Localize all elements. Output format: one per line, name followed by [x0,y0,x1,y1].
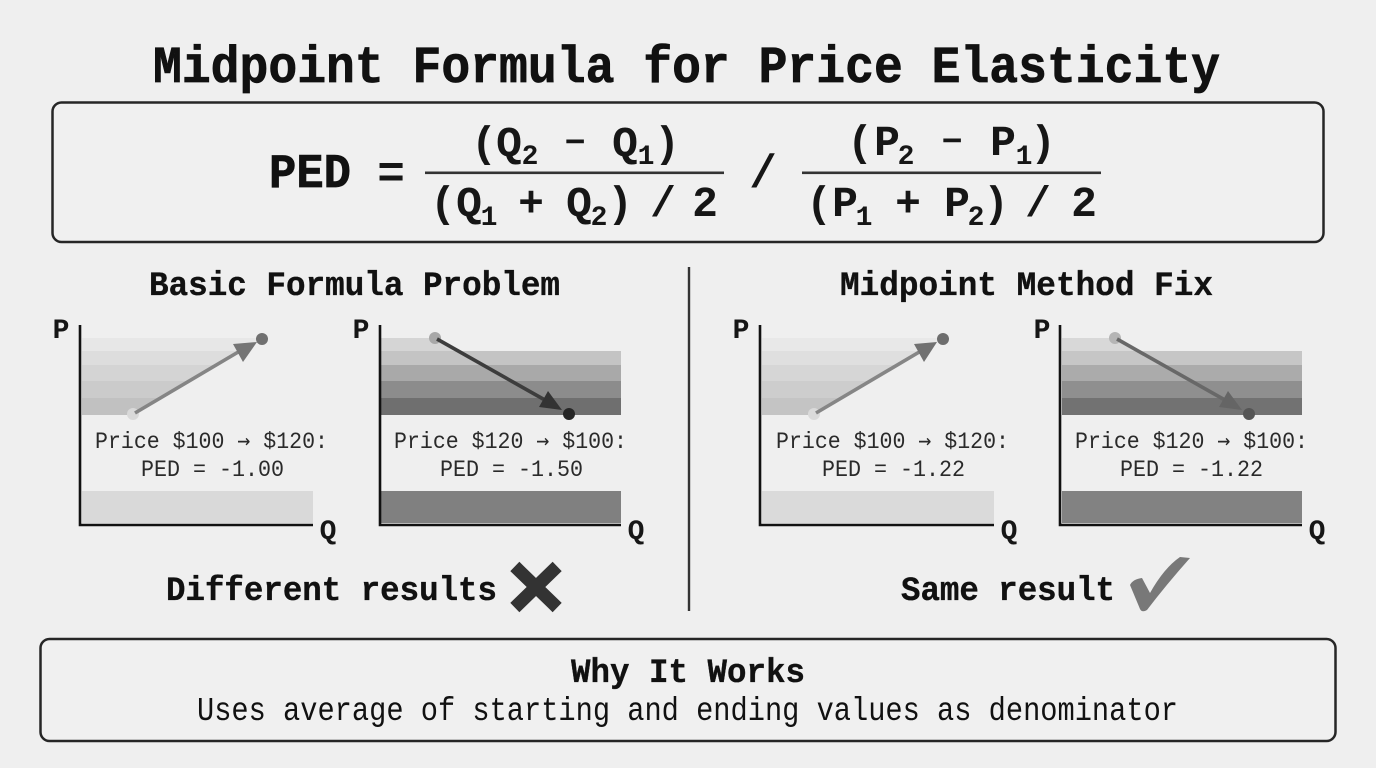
price fraction: P [990,119,1016,168]
result: same result [901,557,1190,611]
quantity fraction: 2 [591,203,607,234]
price fraction [802,119,1101,234]
price fraction: 1 [1016,142,1032,173]
caption: Price $100 → $120: [95,428,328,455]
division slash: / [749,149,777,201]
caption: PED = -1.00 [141,457,284,483]
quantity fraction: 2 [522,142,538,173]
title: Midpoint Formula for Price Elasticity [153,39,1220,98]
quantity fraction: / [650,180,676,229]
axis label P: P [1034,316,1050,347]
price fraction: ( [847,119,873,168]
panel text: Uses average of starting and ending values as denominator [197,693,1178,730]
axis label P: P [733,316,749,347]
price fraction: / [1025,180,1051,229]
caption [776,428,1009,483]
quantity fraction: 2 [692,180,718,229]
axis label P: P [353,316,369,347]
price fraction: 1 [856,203,872,234]
caption: Price $120 → $100: [394,428,627,455]
quantity fraction: ( [430,180,456,229]
axis label P: P [53,316,69,347]
chart: midpoint, price rises [733,316,1017,548]
icon: cross [520,571,552,603]
quantity fraction: + [518,180,544,229]
price fraction: P [944,180,970,229]
price fraction: P [832,180,858,229]
quantity fraction [425,120,724,234]
quantity fraction: Q [566,180,592,229]
caption [394,428,627,483]
price fraction: 2 [968,203,984,234]
price fraction: ) [1030,119,1056,168]
quantity fraction: ) [607,180,633,229]
quantity fraction: Q [612,120,638,169]
quantity fraction: ( [471,120,497,169]
quantity fraction: Q [496,120,522,169]
arrow: down [429,332,575,420]
caption: PED = -1.22 [822,457,965,483]
chart: basic, price rises [53,316,336,548]
price fraction: 2 [898,142,914,173]
formula label: PED: PED [269,148,351,202]
axis label Q: Q [320,517,336,548]
equals sign: = [377,149,405,201]
caption: Price $100 → $120: [776,428,1009,455]
chart: basic, price falls [353,316,644,548]
axis label Q: Q [1309,517,1325,548]
caption: Price $120 → $100: [1075,428,1308,455]
caption: PED = -1.50 [440,457,583,483]
result: same result: Same result [901,573,1115,611]
heading: basic formula problem: Basic Formula Problem [149,268,560,306]
price fraction: P [874,119,900,168]
result: different results: Different results [166,573,497,611]
quantity fraction: 1 [481,203,497,234]
panel: why it works [40,639,1336,741]
caption [95,428,328,483]
price fraction: + [895,180,921,229]
heading: midpoint method fix: Midpoint Method Fix [840,268,1213,306]
price fraction: ) [983,180,1009,229]
quantity fraction: Q [456,180,482,229]
icon: check mark [1130,557,1190,611]
caption: PED = -1.22 [1120,457,1263,483]
quantity fraction: ) [654,120,680,169]
price fraction: 2 [1071,180,1097,229]
panel heading: Why It Works [571,655,805,693]
axis label Q: Q [1001,517,1017,548]
caption [1075,428,1308,483]
price fraction: ( [806,180,832,229]
chart: midpoint, price falls [1034,316,1325,548]
arrow: up [127,333,268,420]
price fraction: − [941,123,963,163]
quantity fraction: − [564,124,586,164]
arrow: up [808,333,949,420]
panel: formula [52,102,1324,242]
axis label Q: Q [628,517,644,548]
quantity fraction: 1 [638,142,654,173]
arrow: down [1109,332,1255,420]
